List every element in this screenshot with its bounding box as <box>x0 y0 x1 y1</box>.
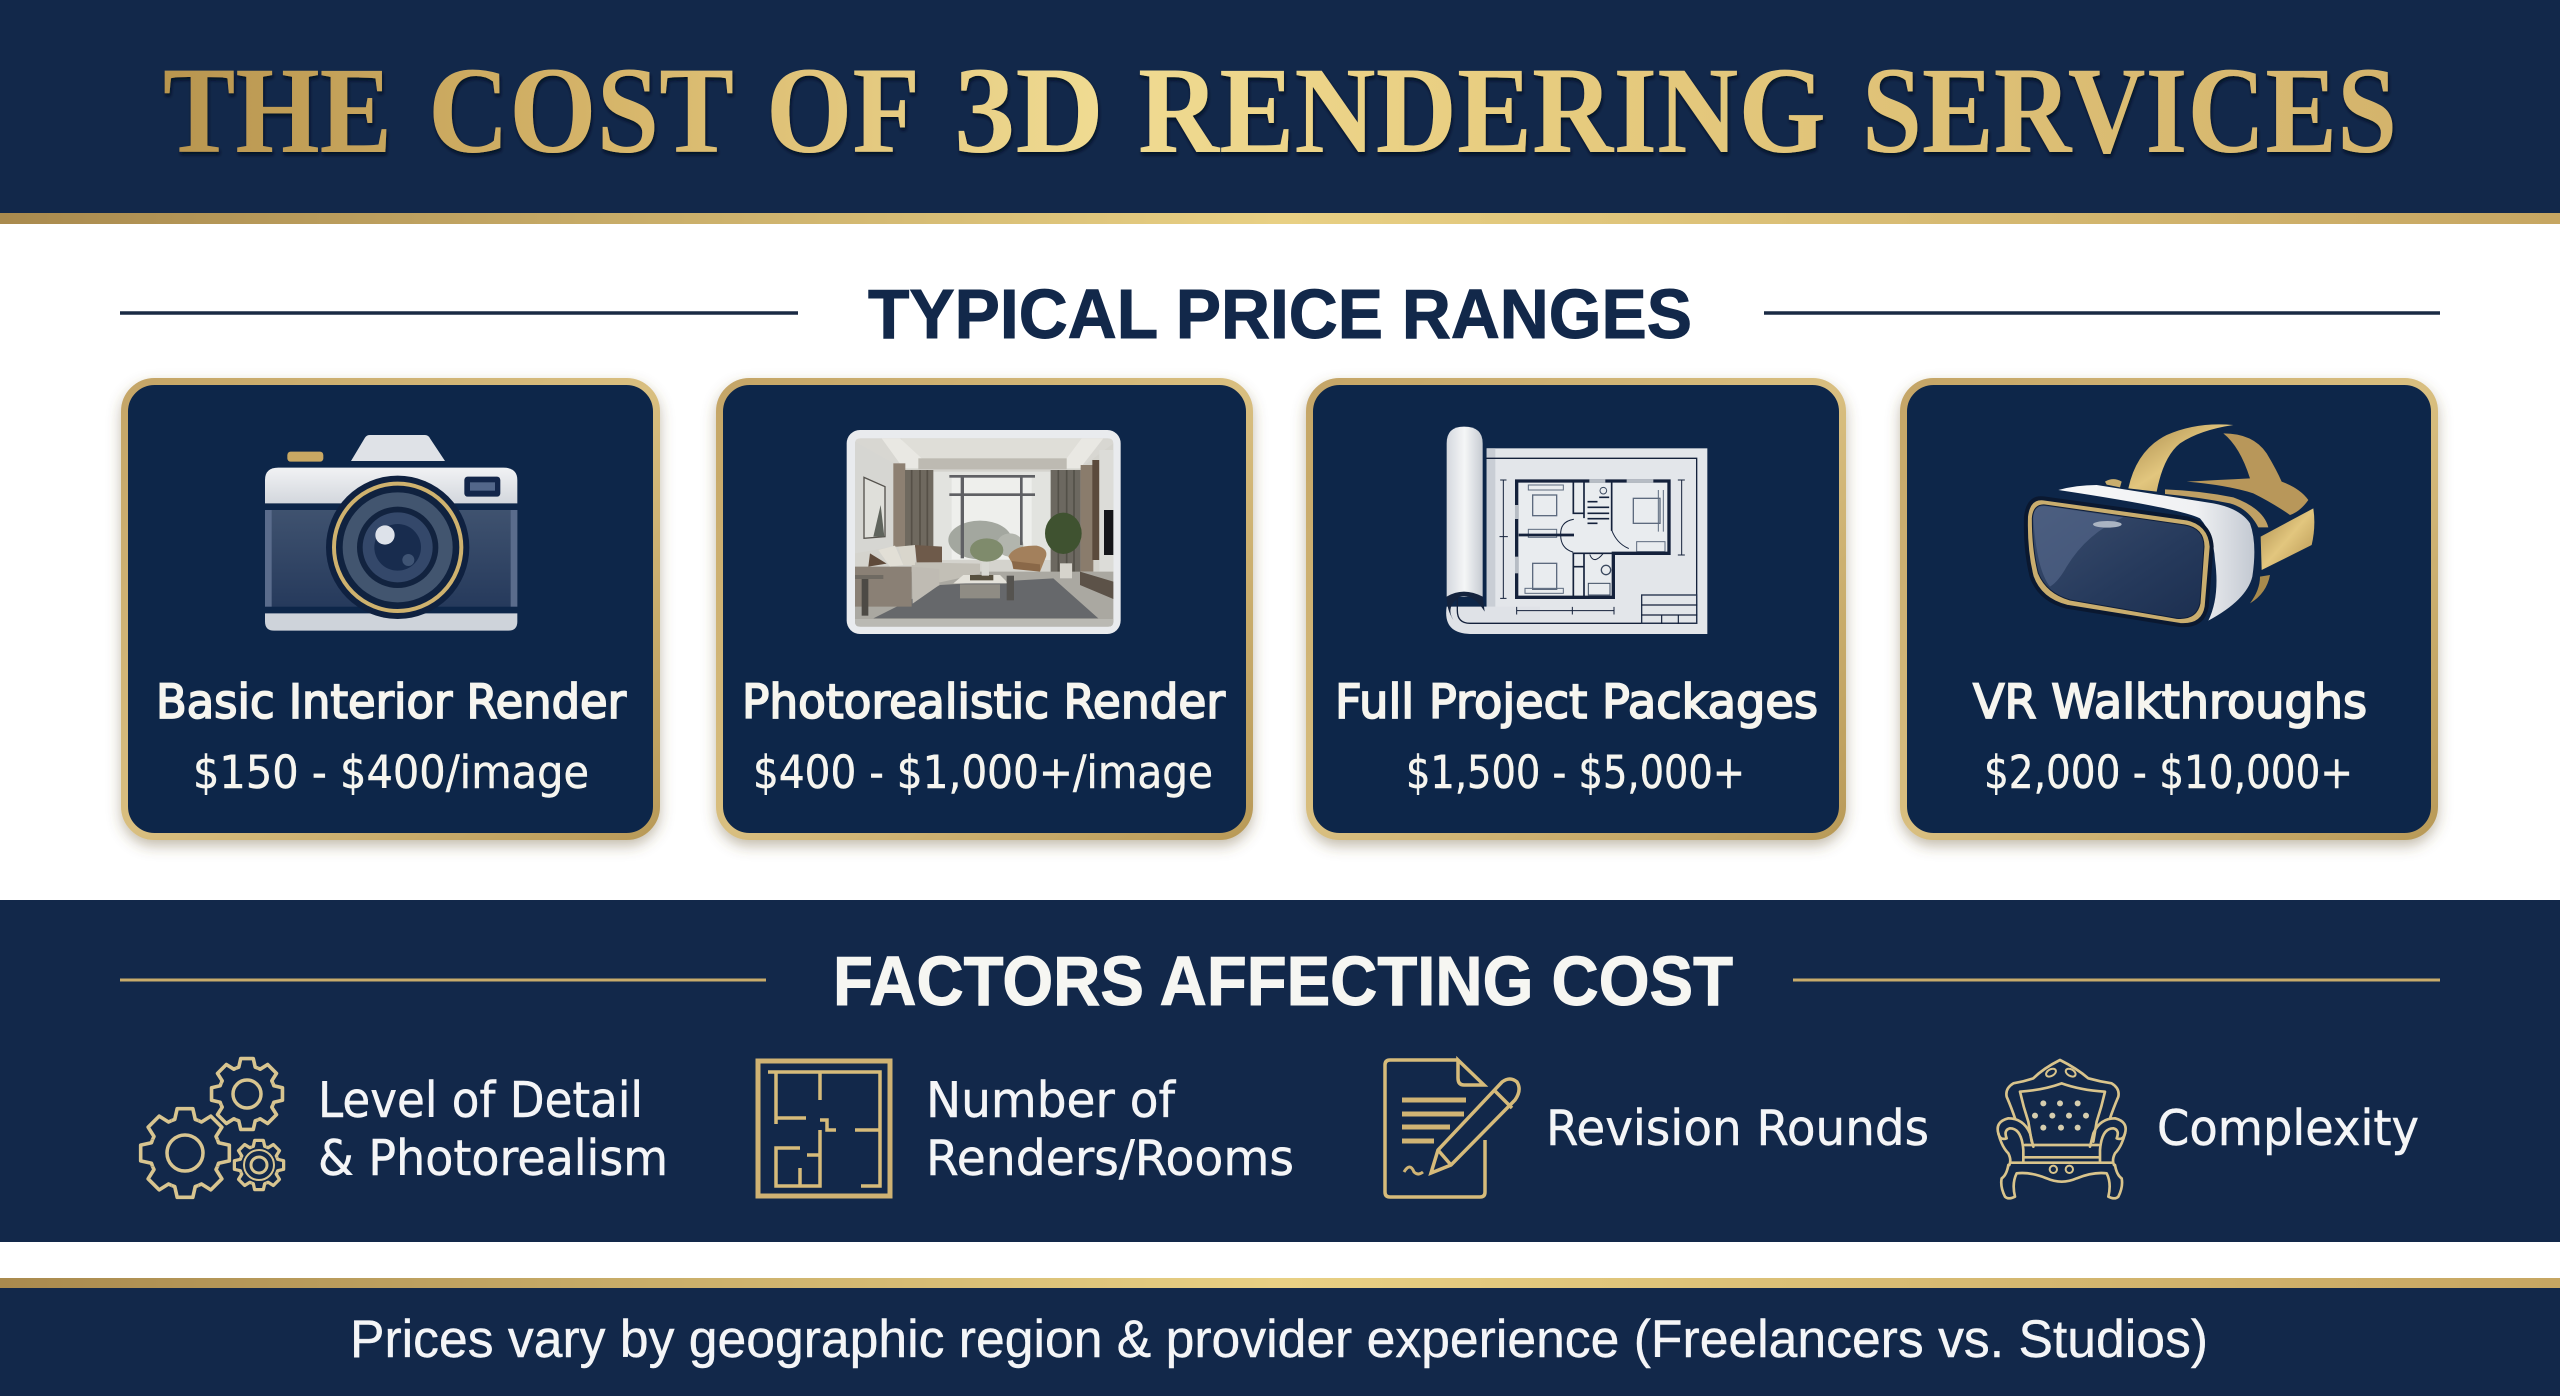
section heading: factors affecting cost: FACTORS AFFECTING COST <box>833 942 1733 1020</box>
factor label: number of renders <box>926 1072 1294 1187</box>
factor label: number of renders: Renders/Rooms <box>926 1130 1294 1187</box>
card price: $150 - $400/image <box>193 746 589 799</box>
title: COST <box>428 42 732 179</box>
header banner <box>0 0 2560 213</box>
factor label: revision rounds: Revision Rounds <box>1546 1100 1929 1157</box>
gold rule under header <box>0 213 2560 224</box>
card price: $2,000 - $10,000+ <box>1984 746 2353 799</box>
title: THE <box>163 42 392 179</box>
icon: camera <box>265 435 517 631</box>
card price: $400 - $1,000+/image <box>753 746 1213 799</box>
panel: factors affecting cost <box>0 900 2560 1242</box>
factor label: number of renders: Number of <box>926 1072 1177 1129</box>
panel: VR walkthroughs <box>1904 382 2434 836</box>
factor label: level of detail <box>318 1072 668 1187</box>
footer note: Prices vary by geographic region & provider experience (Freelancers vs. Studios) <box>350 1310 2208 1369</box>
gold rule above footer <box>0 1278 2560 1288</box>
title: 3D <box>954 42 1104 179</box>
icon: document and pencil <box>1385 1060 1519 1197</box>
icon: ornate armchair <box>1998 1060 2126 1198</box>
icon: blueprint <box>1446 427 1707 634</box>
factor label: level of detail: & Photorealism <box>318 1130 668 1187</box>
factor label: complexity: Complexity <box>2157 1100 2419 1157</box>
card title: VR Walkthroughs <box>1973 675 2367 730</box>
title: OF <box>766 42 916 179</box>
card title: Photorealistic Render <box>742 675 1226 730</box>
card title: Full Project Packages <box>1335 675 1818 730</box>
icon: interior photo <box>847 430 1121 634</box>
card title: Basic Interior Render <box>156 675 627 730</box>
section heading: typical price ranges: TYPICAL PRICE RANGES <box>868 275 1692 353</box>
icon: VR headset <box>2026 424 2314 625</box>
panel: photorealistic render <box>720 382 1250 836</box>
panel: full project packages <box>1310 382 1842 836</box>
icon: floor plan <box>758 1061 890 1196</box>
footer banner <box>0 1288 2560 1396</box>
panel: basic interior render <box>124 382 656 836</box>
title: RENDERING <box>1138 42 1826 179</box>
title: SERVICES <box>1862 42 2397 179</box>
card price: $1,500 - $5,000+ <box>1406 746 1745 799</box>
icon: gears <box>141 1059 284 1197</box>
factor label: level of detail: Level of Detail <box>318 1072 643 1129</box>
